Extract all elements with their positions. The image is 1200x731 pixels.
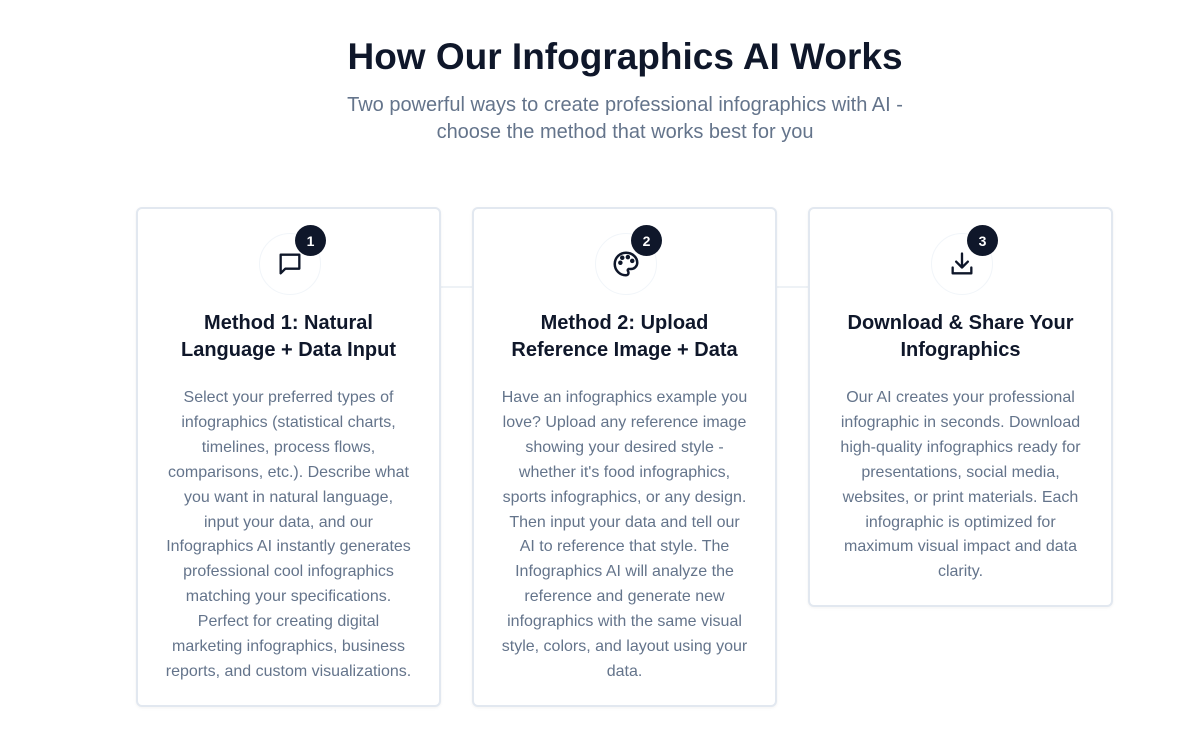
body text: you want in natural language, — [184, 489, 393, 506]
badge 3 — [967, 225, 998, 256]
badge 1: 1 — [307, 232, 314, 248]
body text: style, colors, and layout using your — [502, 638, 747, 655]
body text: infographic in seconds. Download — [841, 414, 1080, 431]
body text: reports, and custom visualizations. — [166, 663, 411, 680]
body text — [166, 389, 411, 680]
subtitle: Two powerful ways to create professional infographics with AI - — [347, 94, 903, 116]
heading: Language + Data Input — [181, 339, 396, 361]
body text: AI to reference that style. The — [520, 538, 729, 555]
heading: Download & Share Your — [848, 312, 1073, 334]
body text: infographics (statistical charts, — [181, 414, 396, 431]
body text: Perfect for creating digital — [198, 613, 379, 630]
body text: whether it's food infographics, — [519, 464, 730, 481]
heading — [511, 312, 738, 361]
body text: infographic is optimized for — [865, 514, 1056, 531]
body text: Have an infographics example you — [502, 389, 747, 406]
icon: chat bubble — [259, 233, 321, 295]
body text: infographics with the same visual — [507, 613, 742, 630]
heading: Method 2: Upload — [541, 312, 708, 334]
body text: websites, or print materials. Each — [843, 489, 1078, 506]
body text: love? Upload any reference image — [503, 414, 746, 431]
title: How Our Infographics AI Works — [347, 36, 903, 77]
body text: input your data, and our — [204, 514, 373, 531]
heading: Method 1: Natural — [204, 312, 373, 334]
panel: method 1 — [136, 207, 441, 707]
badge 2 — [631, 225, 662, 256]
heading — [848, 312, 1074, 361]
icon: download — [931, 233, 993, 295]
body text: high-quality infographics ready for — [840, 439, 1081, 456]
icon: palette — [595, 233, 657, 295]
body text: Infographics AI will analyze the — [515, 563, 734, 580]
body text: Our AI creates your professional — [846, 389, 1075, 406]
body text: data. — [607, 663, 642, 680]
heading: Reference Image + Data — [511, 339, 738, 361]
subtitle — [347, 94, 903, 143]
body text: professional cool infographics — [183, 563, 394, 580]
body text: sports infographics, or any design. — [503, 489, 746, 506]
body text: Select your preferred types of — [184, 389, 393, 406]
connector line 2-3 — [776, 286, 808, 288]
connector line 1-2 — [440, 286, 472, 288]
body text: Infographics AI instantly generates — [166, 538, 411, 555]
subtitle: choose the method that works best for you — [437, 121, 813, 143]
body text: presentations, social media, — [861, 464, 1060, 481]
body text: matching your specifications. — [186, 588, 391, 605]
body text: comparisons, etc.). Describe what — [168, 464, 409, 481]
body text: marketing infographics, business — [172, 638, 405, 655]
panel: download — [808, 207, 1113, 607]
body text: clarity. — [938, 563, 983, 580]
body text: maximum visual impact and data — [844, 538, 1077, 555]
badge 3: 3 — [979, 232, 986, 248]
body text: reference and generate new — [524, 588, 725, 605]
badge 1 — [295, 225, 326, 256]
body text — [840, 389, 1081, 580]
body text: showing your desired style - — [525, 439, 724, 456]
body text: timelines, process flows, — [202, 439, 375, 456]
heading: Infographics — [900, 339, 1020, 361]
badge 2: 2 — [643, 232, 650, 248]
heading — [181, 312, 396, 361]
panel: method 2 — [472, 207, 777, 707]
body text — [502, 389, 747, 680]
body text: Then input your data and tell our — [509, 514, 740, 531]
